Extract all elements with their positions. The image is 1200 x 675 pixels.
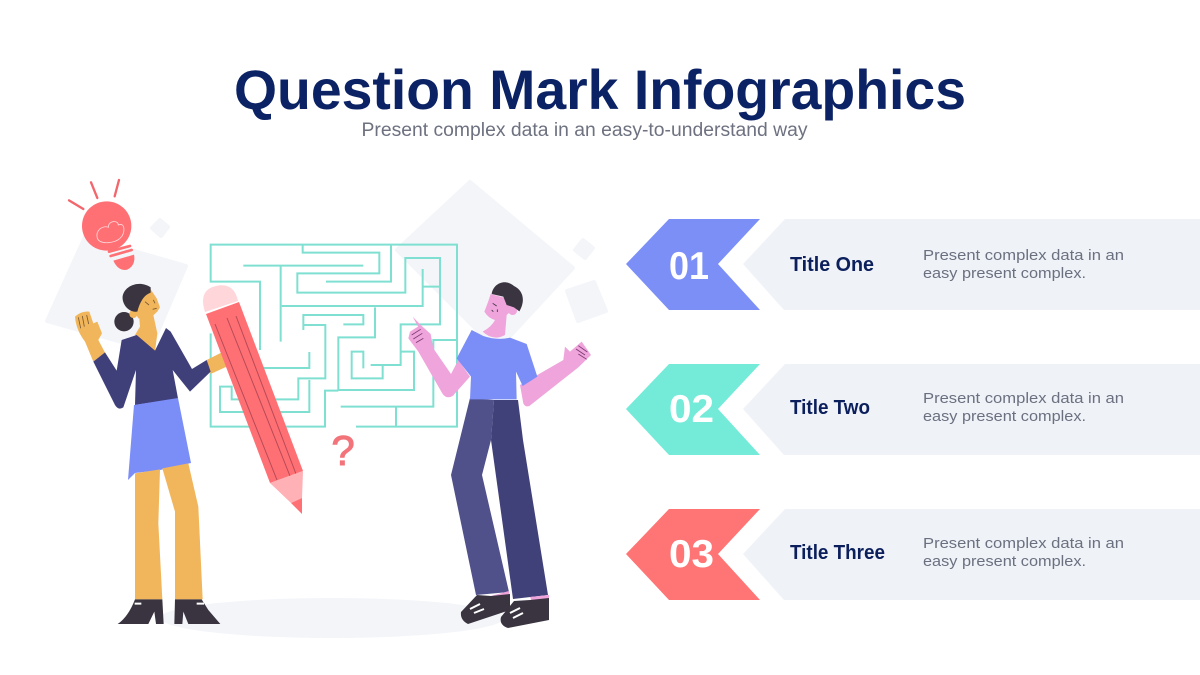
row 3 — [626, 509, 1200, 600]
maze — [211, 245, 457, 427]
row 2 — [626, 364, 1200, 455]
floor shadow — [160, 598, 504, 638]
pants — [451, 398, 509, 595]
description 1: Present complex data in an — [923, 247, 1124, 264]
panel: row 2 background — [743, 364, 1200, 455]
badge: 01 — [626, 219, 760, 310]
pencil wood — [270, 471, 303, 503]
face details — [145, 300, 157, 309]
description 2: Present complex data in an — [923, 390, 1124, 407]
t-shirt — [457, 330, 537, 399]
question mark: ? — [331, 427, 355, 474]
character: woman — [75, 284, 227, 624]
panel: row 3 background — [743, 509, 1200, 600]
heading: title three: Title Three — [790, 542, 885, 564]
pointing arm and hand — [408, 317, 470, 397]
neck — [135, 312, 157, 352]
hair bun — [114, 312, 134, 331]
other hand — [207, 352, 227, 374]
sneakers — [461, 594, 510, 624]
character: man — [408, 282, 591, 628]
number 02: 02 — [669, 388, 714, 431]
description 2: easy present complex. — [923, 408, 1086, 425]
heading: title one: Title One — [790, 254, 874, 276]
socks — [491, 591, 510, 602]
pencil tip — [291, 498, 302, 514]
hair — [492, 282, 523, 311]
ear — [508, 306, 517, 315]
title: Question Mark Infographics — [234, 58, 966, 121]
pencil — [203, 285, 303, 514]
heading: title two: Title Two — [790, 397, 870, 419]
hair — [123, 284, 151, 312]
number 03: 03 — [669, 533, 714, 576]
raised hand — [75, 312, 105, 362]
subtitle: Present complex data in an easy-to-understand way — [362, 120, 808, 141]
pencil body — [206, 302, 303, 483]
face details — [492, 303, 497, 312]
face — [130, 288, 160, 318]
ear — [129, 310, 137, 318]
description 1: easy present complex. — [923, 265, 1086, 282]
description 3: Present complex data in an — [923, 535, 1124, 552]
illustration: two people solving a maze — [47, 180, 606, 638]
icon: light bulb — [69, 180, 134, 270]
badge: 03 — [626, 509, 760, 600]
other arm and hand — [520, 342, 591, 406]
blouse — [93, 328, 211, 409]
background shapes — [47, 182, 606, 350]
panel: row 1 background — [743, 219, 1200, 310]
eraser — [203, 285, 238, 312]
row 1 — [626, 219, 1200, 310]
description 3: easy present complex. — [923, 553, 1086, 570]
badge: 02 — [626, 364, 760, 455]
shoes — [118, 599, 164, 624]
neck and head — [483, 294, 514, 338]
legs — [135, 469, 162, 599]
number 01: 01 — [669, 245, 709, 288]
skirt — [128, 398, 191, 480]
